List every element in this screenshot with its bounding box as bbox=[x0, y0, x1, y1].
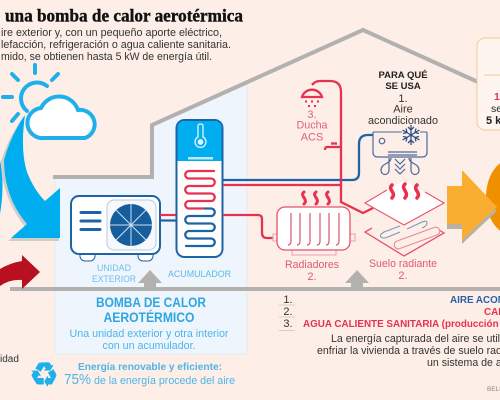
text: renewable energy: de la energía procede del aire bbox=[94, 375, 235, 387]
pipes: house circuit bbox=[223, 81, 373, 238]
text: renewable energy bbox=[64, 362, 235, 388]
text: heat pump description bbox=[70, 328, 229, 352]
ground line bbox=[10, 287, 500, 291]
list: uses: 3. bbox=[283, 318, 293, 330]
arrow: left support bbox=[138, 270, 162, 288]
text: renewable energy: Energía renovable y eficiente: bbox=[78, 362, 222, 373]
icon: radiator bbox=[273, 192, 355, 255]
intro text: ire exterior y, con un pequeño aporte eléctrico, bbox=[1, 27, 222, 39]
tank coil bbox=[185, 171, 215, 246]
icon: shower bbox=[302, 90, 341, 150]
intro text: lefacción, refrigeración o agua caliente sanitaria. bbox=[1, 39, 231, 51]
text: heat pump description: con un acumulador. bbox=[102, 340, 196, 352]
icon: underfloor heating bbox=[365, 181, 444, 256]
label: air conditioning: acondicionado bbox=[368, 115, 438, 127]
label: shower: ACS bbox=[301, 132, 323, 144]
label: radiators: 2. bbox=[307, 271, 317, 283]
icon: sun bbox=[3, 65, 58, 121]
label: underfloor heating: Suelo radiante bbox=[369, 258, 437, 270]
text: renewable energy: 75% bbox=[64, 371, 91, 388]
icon: air conditioner bbox=[373, 132, 427, 174]
arrow: useful energy bbox=[447, 170, 497, 244]
callout: 1 bbox=[494, 91, 500, 103]
label: shower: 3. bbox=[307, 109, 317, 121]
list: uses bbox=[279, 294, 500, 330]
arrow: right support bbox=[345, 270, 369, 288]
label: shower: Ducha bbox=[296, 120, 328, 132]
panel: tank bbox=[176, 120, 222, 257]
heading: heat pump: BOMBA DE CALOR bbox=[96, 295, 206, 310]
heading: uses bbox=[378, 70, 428, 92]
icon: thermometer bbox=[195, 124, 206, 147]
label: outdoor unit: UNIDAD bbox=[97, 263, 131, 274]
heading: uses: PARA QUÉ bbox=[378, 70, 428, 81]
text: explanation bbox=[317, 333, 500, 369]
label: tank: ACUMULADOR bbox=[168, 269, 231, 280]
panel: heat pump background bbox=[55, 83, 247, 354]
label: air conditioning bbox=[368, 93, 438, 127]
pipes: unit to tank bbox=[160, 215, 176, 220]
heading: uses: SE USA bbox=[385, 81, 421, 92]
intro text: mido, se obtienen hasta 5 kW de energía útil. bbox=[1, 51, 212, 63]
label: underfloor heating: 2. bbox=[398, 270, 408, 282]
arrow: electric input bbox=[0, 255, 40, 289]
heading: heat pump: AEROTÉRMICO bbox=[104, 310, 194, 325]
callout bbox=[477, 38, 500, 130]
label: underfloor heating bbox=[369, 258, 437, 282]
circle: outgoing energy bbox=[486, 159, 500, 235]
label: outdoor unit bbox=[92, 263, 136, 285]
icon: cloud bbox=[27, 97, 95, 138]
house outline bbox=[53, 30, 478, 177]
icon: snowflake bbox=[402, 125, 420, 145]
label: radiators bbox=[285, 259, 339, 283]
list: uses: 1. bbox=[283, 294, 293, 306]
text: heat pump description: Una unidad exterior y otra interior bbox=[70, 328, 229, 340]
icon: recycling: ♻ bbox=[29, 355, 59, 394]
title: una bomba de calor aerotérmica bbox=[5, 6, 243, 26]
label: radiators: Radiadores bbox=[285, 259, 339, 271]
label: air conditioning: 1. bbox=[398, 93, 408, 105]
arrow: incoming air bbox=[0, 115, 60, 241]
list: uses: 2. bbox=[283, 306, 293, 318]
label: outdoor unit: EXTERIOR bbox=[92, 274, 136, 285]
panel: outdoor unit bbox=[71, 196, 160, 261]
label: shower bbox=[296, 109, 328, 144]
intro text bbox=[1, 27, 231, 63]
label: air conditioning: Aire bbox=[393, 104, 413, 116]
cropped text: idad bbox=[0, 354, 19, 365]
heading: heat pump bbox=[96, 295, 206, 325]
